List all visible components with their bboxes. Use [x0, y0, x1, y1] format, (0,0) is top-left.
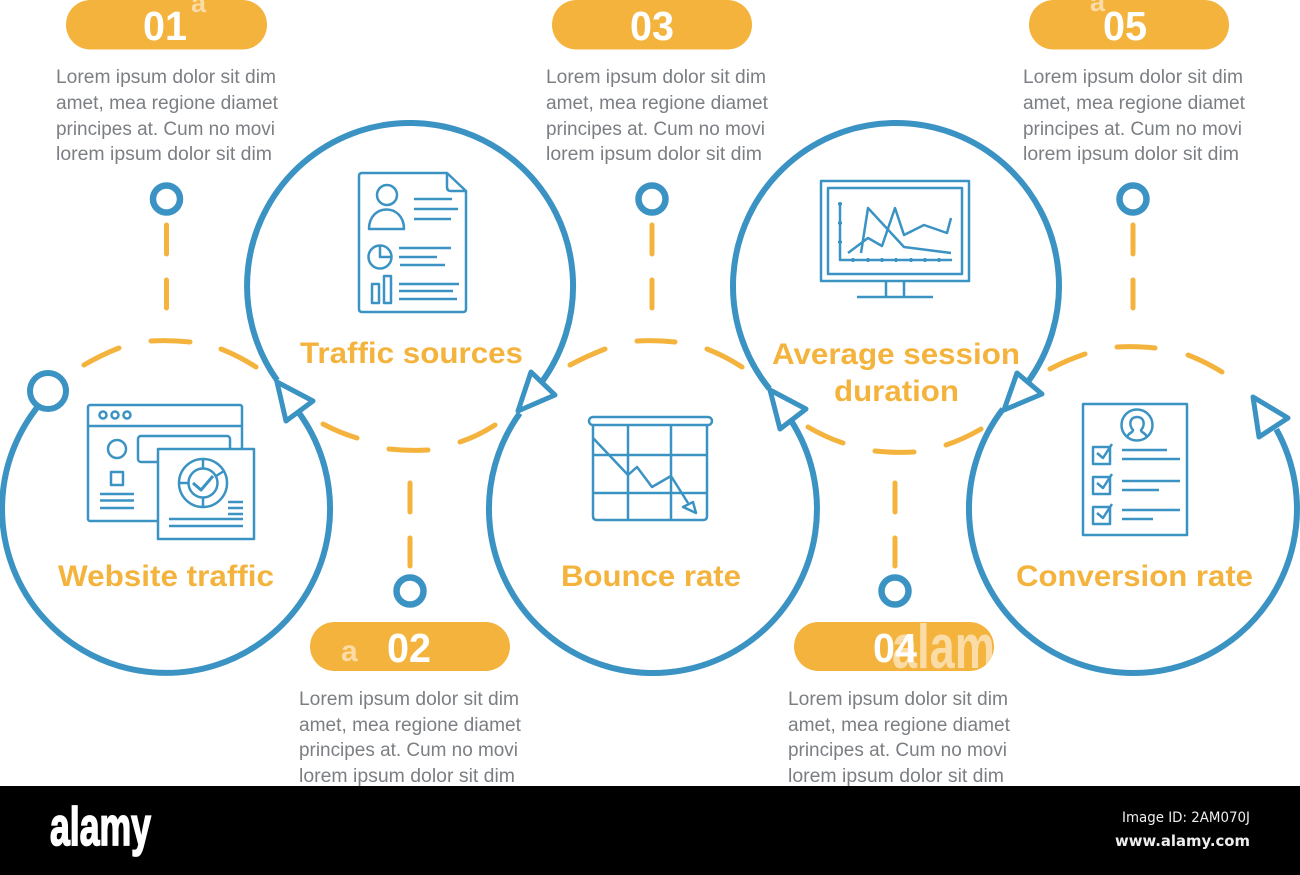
- header pill 02: [310, 622, 510, 671]
- text block 04: amet, mea regione diamet: [788, 715, 1011, 736]
- text block 03: lorem ipsum dolor sit dim: [546, 144, 762, 165]
- header pill 01: [66, 0, 267, 50]
- label: conversion rate: Conversion rate: [1016, 560, 1253, 593]
- step 2: traffic sources: [247, 123, 573, 787]
- text block 05: amet, mea regione diamet: [1023, 93, 1246, 114]
- dashed arc 05: [1050, 347, 1222, 372]
- header pill 03: 03: [630, 3, 674, 49]
- label: website traffic: Website traffic: [58, 560, 274, 593]
- dashed arc 03: [570, 341, 742, 367]
- footer band: [0, 786, 1300, 875]
- text block 01: [56, 67, 279, 165]
- step 1: website traffic: [2, 0, 330, 673]
- text block 04: Lorem ipsum dolor sit dim: [788, 689, 1008, 710]
- step 5: conversion rate: [969, 0, 1297, 673]
- label: average session duration: Average session: [772, 338, 1020, 371]
- text block 02: principes at. Cum no movi: [299, 740, 518, 761]
- text block 04: [788, 689, 1011, 787]
- text block 02: Lorem ipsum dolor sit dim: [299, 689, 519, 710]
- header pill 04: 04: [873, 625, 917, 671]
- text block 01: Lorem ipsum dolor sit dim: [56, 67, 276, 88]
- dashed arc 01: [84, 341, 256, 367]
- arrow head 02: [518, 372, 555, 411]
- connector 05: [1120, 186, 1146, 308]
- arrow head 01: [277, 382, 313, 421]
- connector 02: [396, 483, 424, 604]
- header pill 01: 01: [143, 3, 187, 49]
- text block 05: Lorem ipsum dolor sit dim: [1023, 67, 1243, 88]
- dashed arc 04: [808, 427, 981, 452]
- label: average session duration: [772, 338, 1020, 408]
- circle outline 03: [489, 413, 817, 673]
- label: traffic sources: Traffic sources: [300, 337, 523, 370]
- footer logo: alamy: [50, 797, 151, 857]
- connector 04: [882, 483, 908, 604]
- arrow head 04: [1004, 373, 1042, 410]
- text block 02: amet, mea regione diamet: [299, 715, 522, 736]
- text block 01: principes at. Cum no movi: [56, 119, 275, 140]
- connector 01: [153, 186, 180, 308]
- header pill 05: 05: [1103, 3, 1147, 49]
- icon: falling chart board: [589, 417, 712, 520]
- circle outline 01: [2, 393, 330, 673]
- text block 05: principes at. Cum no movi: [1023, 119, 1242, 140]
- header pill 04: [794, 622, 994, 671]
- step 3: bounce rate: [489, 0, 817, 673]
- text block 01: amet, mea regione diamet: [56, 93, 279, 114]
- text block 05: lorem ipsum dolor sit dim: [1023, 144, 1239, 165]
- text block 03: amet, mea regione diamet: [546, 93, 769, 114]
- header pill 03: [552, 0, 752, 50]
- start ring: [30, 373, 66, 409]
- icon: checklist profile: [1083, 404, 1187, 535]
- header pill 04: alamy: [892, 613, 1020, 682]
- text block 04: lorem ipsum dolor sit dim: [788, 766, 1004, 787]
- text block 04: principes at. Cum no movi: [788, 740, 1007, 761]
- text block 02: [299, 689, 522, 787]
- step 4: average session duration: [733, 123, 1059, 787]
- header pill 05: [1029, 0, 1229, 50]
- text block 05: [1023, 67, 1246, 165]
- circle outline 02: [247, 123, 573, 385]
- arrow head 05: [1253, 397, 1288, 437]
- header pill 02: 02: [387, 625, 431, 671]
- arrow head 03: [770, 390, 806, 429]
- circle outline 04: [733, 123, 1059, 389]
- footer image id: Image ID: 2AM070J: [1122, 810, 1250, 826]
- label: bounce rate: Bounce rate: [561, 560, 741, 593]
- connector 03: [638, 186, 666, 308]
- dashed arc 02: [323, 424, 495, 450]
- text block 03: Lorem ipsum dolor sit dim: [546, 67, 766, 88]
- text block 03: [546, 67, 769, 165]
- label: average session duration: duration: [834, 375, 959, 408]
- icon: report document: [359, 173, 466, 312]
- header pill 02: a: [341, 635, 358, 668]
- footer url: www.alamy.com: [1115, 832, 1250, 850]
- icon: monitor with line chart: [821, 181, 969, 297]
- text block 02: lorem ipsum dolor sit dim: [299, 766, 515, 787]
- text block 03: principes at. Cum no movi: [546, 119, 765, 140]
- circle outline 05: [969, 409, 1297, 673]
- icon: browser window with chart: [88, 405, 254, 539]
- text block 01: lorem ipsum dolor sit dim: [56, 144, 272, 165]
